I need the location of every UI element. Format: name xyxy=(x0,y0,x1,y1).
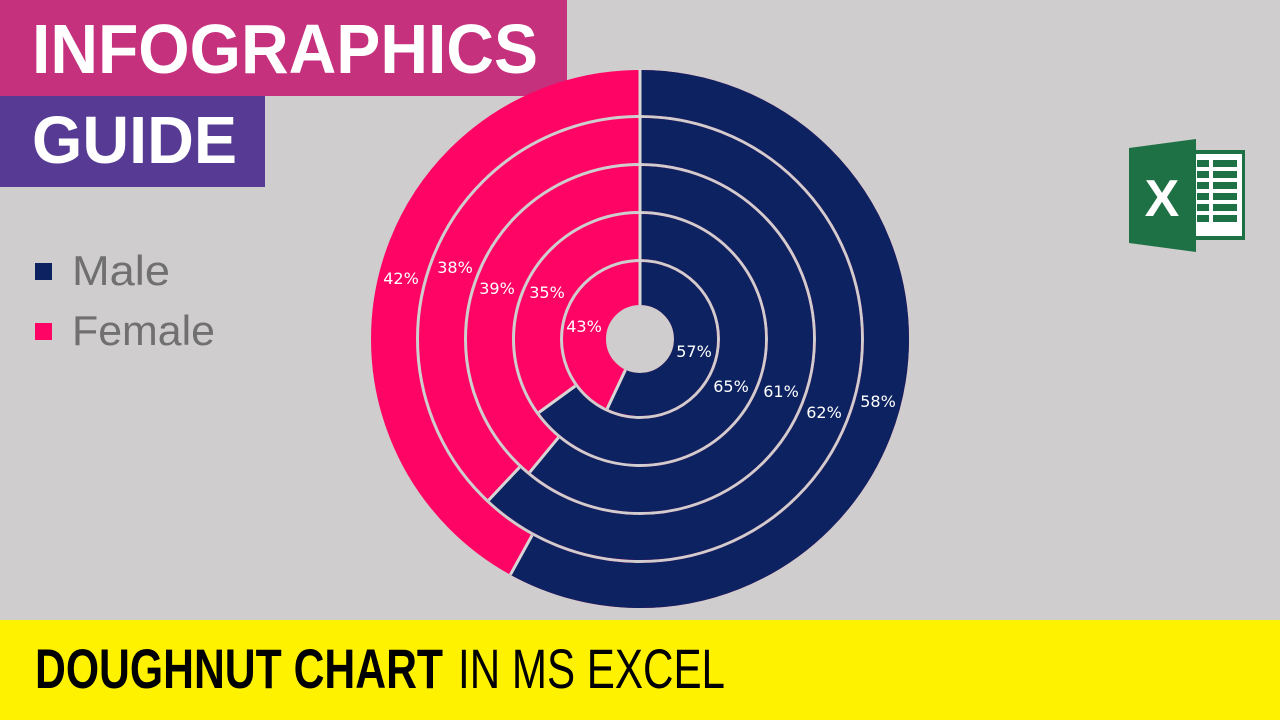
doughnut chart: 39% xyxy=(479,279,515,298)
doughnut chart: 65% xyxy=(713,377,749,396)
doughnut chart xyxy=(383,69,896,586)
icon: excel logo xyxy=(1129,139,1245,252)
doughnut chart: 58% xyxy=(860,392,896,411)
doughnut chart: 57% xyxy=(676,342,712,361)
doughnut chart: 61% xyxy=(763,382,799,401)
doughnut chart: 43% xyxy=(566,317,602,336)
doughnut chart: 35% xyxy=(529,283,565,302)
title banner: INFOGRAPHICS: INFOGRAPHICS xyxy=(32,10,538,88)
doughnut chart: 62% xyxy=(806,403,842,422)
doughnut chart: 42% xyxy=(383,269,419,288)
legend: Male xyxy=(72,247,170,294)
legend xyxy=(35,247,215,354)
title banner: GUIDE xyxy=(0,96,265,187)
doughnut chart: 38% xyxy=(437,258,473,277)
footer bar xyxy=(0,620,1280,720)
legend: Female xyxy=(72,307,215,354)
icon: excel logo: X xyxy=(1145,170,1180,228)
footer bar: IN MS EXCEL xyxy=(458,637,725,700)
footer bar: DOUGHNUT CHART xyxy=(35,637,443,700)
title banner: GUIDE: GUIDE xyxy=(32,103,237,178)
